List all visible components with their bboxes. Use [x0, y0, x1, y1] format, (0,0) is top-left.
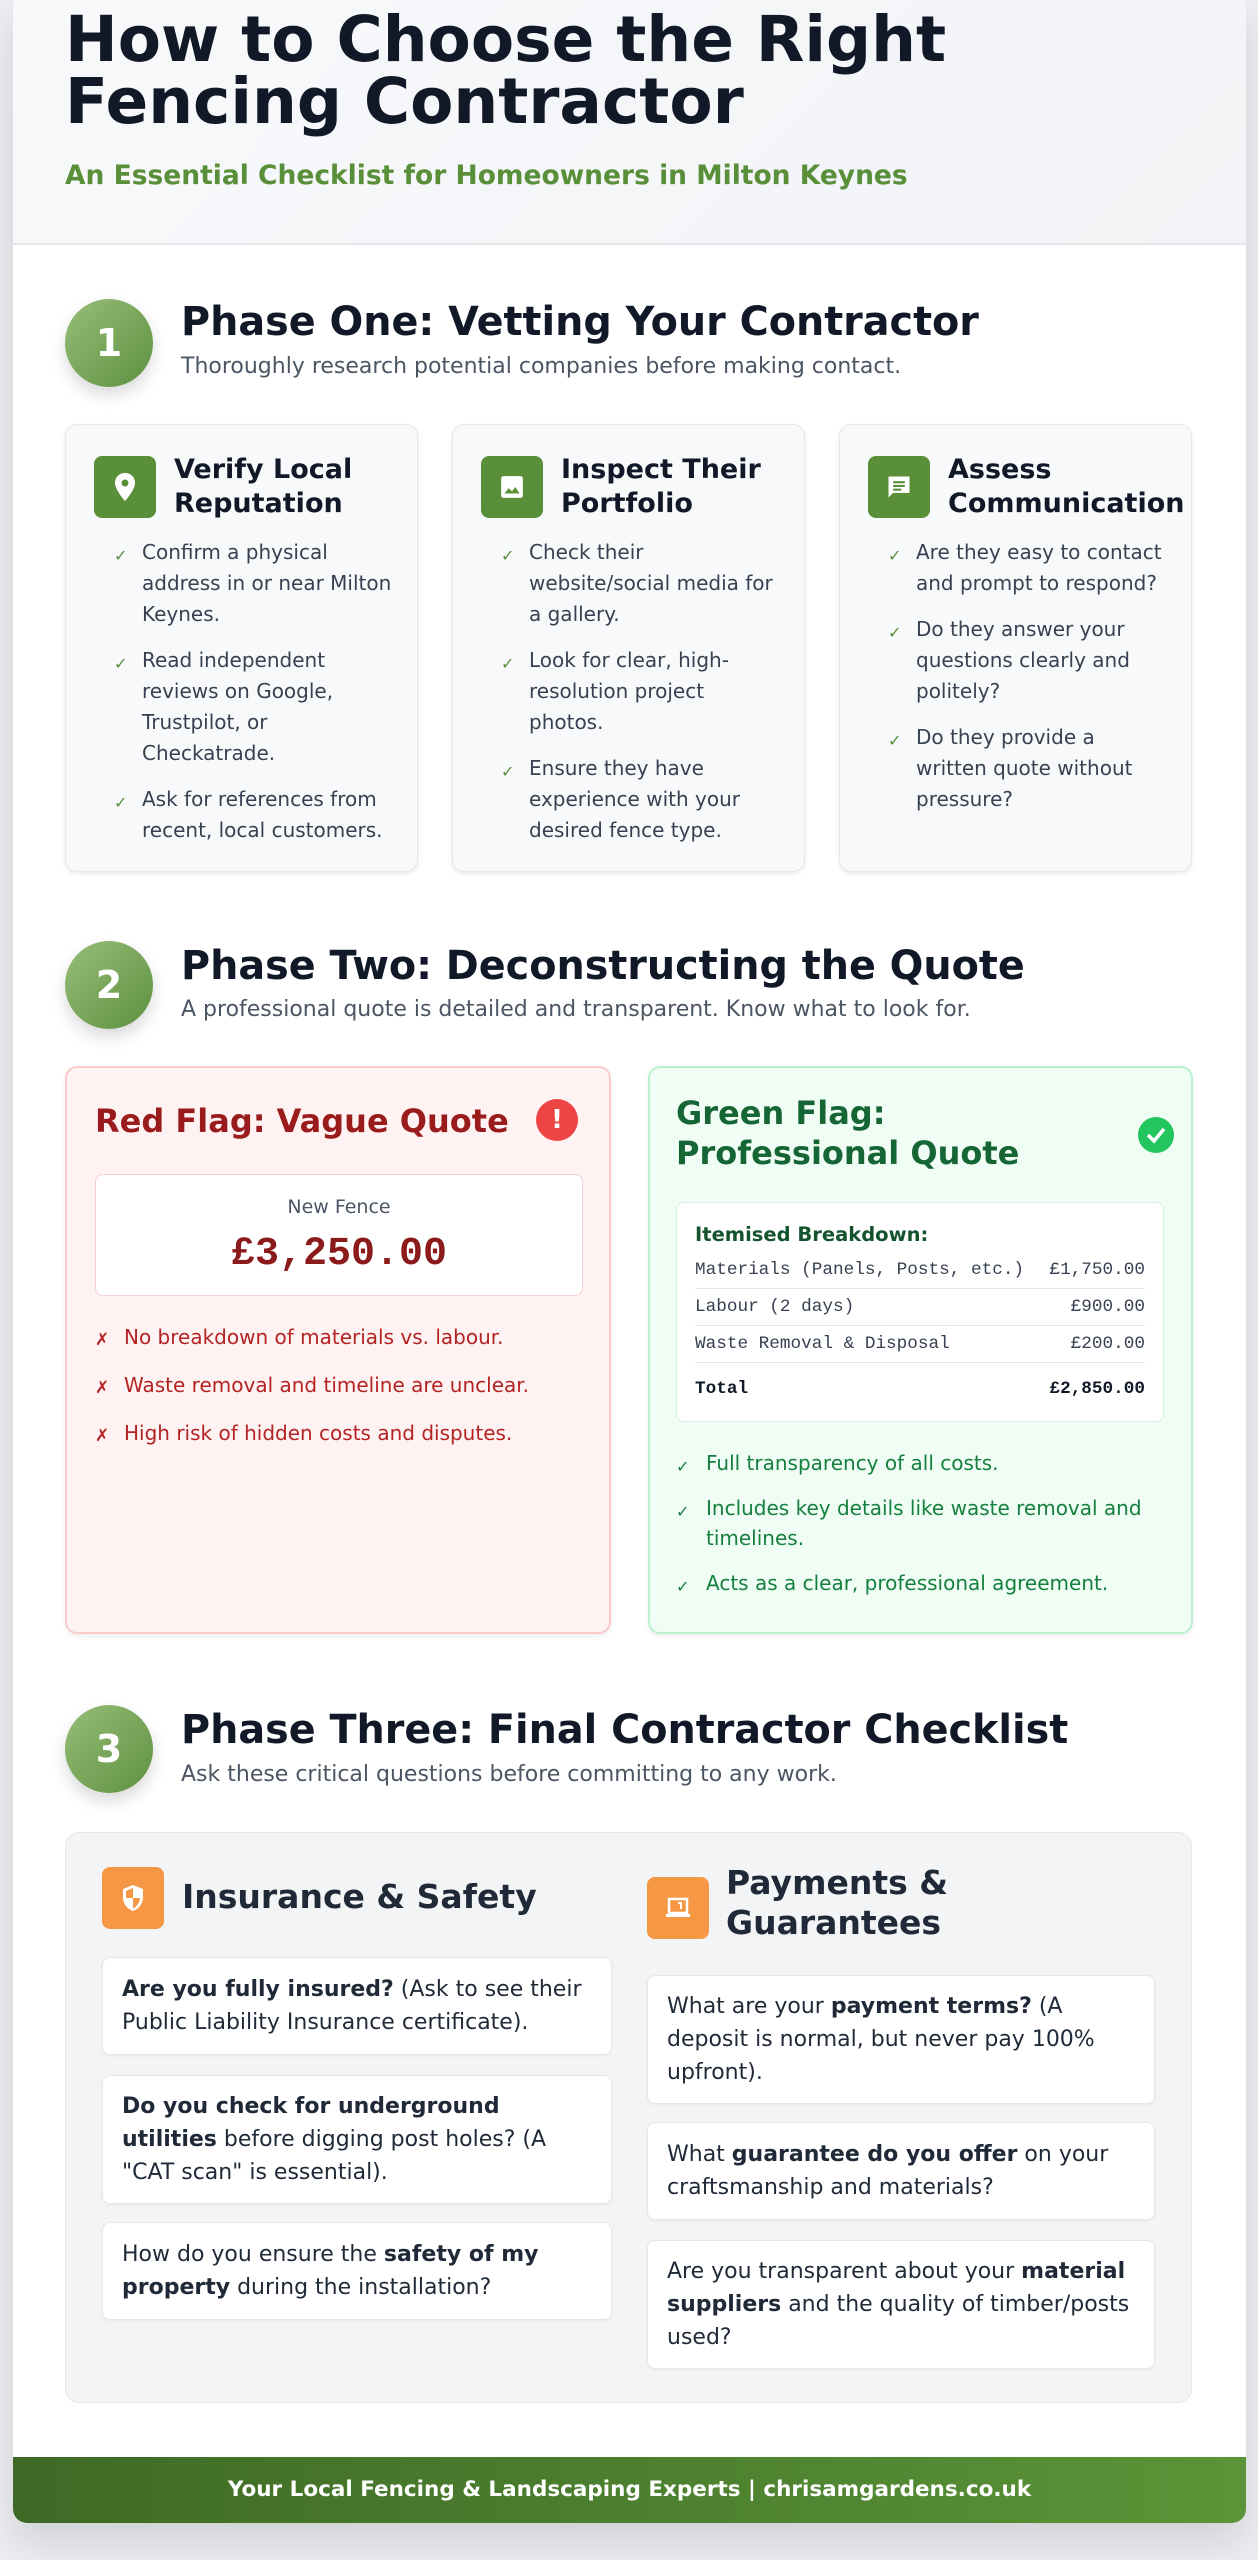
- icon: image: [481, 456, 543, 518]
- insurance heading: Insurance & Safety: [182, 1877, 537, 1916]
- footer: [13, 2457, 1246, 2523]
- panel: red flag: [65, 1066, 611, 1634]
- title: [65, 3, 946, 138]
- phase 1 heading: [60, 299, 979, 400]
- card heading: [948, 454, 1184, 519]
- card heading: [174, 454, 352, 519]
- footer: Your Local Fencing & Landscaping Experts | chrisamgardens.co.uk: [228, 2477, 1031, 2502]
- red flag list: [97, 1325, 529, 1445]
- green flag heading: [676, 1094, 1019, 1172]
- card heading: [561, 454, 761, 519]
- card: verify local reputation: [65, 424, 418, 872]
- checklist: Look for clear, high-resolution project photos.: [529, 648, 729, 734]
- question boxes col 2: [647, 1975, 1155, 2104]
- number badge 1: [65, 299, 153, 387]
- checklist: Read independent reviews on Google, Trustpilot, or Checkatrade.: [142, 648, 333, 765]
- icon: map pin: [94, 456, 156, 518]
- itemised breakdown box: £900.00: [1071, 1297, 1145, 1317]
- red flag list: Waste removal and timeline are unclear.: [124, 1373, 529, 1397]
- title: How to Choose the Right: [65, 3, 946, 76]
- checklist: Are they easy to contact and prompt to respond?: [916, 540, 1162, 595]
- green flag list: Includes key details like waste removal and timelines.: [706, 1496, 1142, 1550]
- number badge 3: 3: [96, 1727, 122, 1771]
- checklist: [503, 540, 773, 842]
- number badge 2: 2: [96, 963, 122, 1007]
- panel: final checklist: [65, 1832, 1192, 2403]
- heading text: Phase Two: Deconstructing the Quote: [181, 943, 1025, 989]
- card heading: Communication: [948, 488, 1184, 519]
- payments heading: Guarantees: [726, 1903, 941, 1942]
- vague quote box: [95, 1174, 583, 1296]
- title: Fencing Contractor: [65, 65, 744, 138]
- question boxes col 2: What are your payment terms? (A deposit is normal, but never pay 100% upfront).: [667, 1994, 1095, 2085]
- card heading: Inspect Their: [561, 454, 761, 485]
- itemised breakdown box: £200.00: [1071, 1334, 1145, 1354]
- phase 3 heading: [60, 1705, 1068, 1806]
- vague quote box: £3,250.00: [231, 1232, 447, 1277]
- card heading: Portfolio: [561, 488, 693, 519]
- question boxes col 1: Are you fully insured? (Ask to see their Public Liability Insurance certificate).: [122, 1977, 581, 2035]
- checklist: Ask for references from recent, local customers.: [142, 787, 383, 842]
- card: inspect portfolio: [452, 424, 805, 872]
- checklist: Do they answer your questions clearly and politely?: [916, 617, 1130, 703]
- icon: exclamation: !: [551, 1105, 563, 1135]
- itemised breakdown box: Labour (2 days): [695, 1297, 854, 1317]
- number badge 3: [65, 1705, 153, 1793]
- checklist: Check their website/social media for a gallery.: [529, 540, 773, 626]
- green flag list: Acts as a clear, professional agreement.: [706, 1571, 1108, 1595]
- itemised breakdown box: Materials (Panels, Posts, etc.): [695, 1260, 1024, 1280]
- phase 1 subtitle: Thoroughly research potential companies before making contact.: [181, 354, 901, 379]
- heading text: Phase One: Vetting Your Contractor: [181, 299, 979, 345]
- card: assess communication: [839, 424, 1192, 872]
- checklist: [890, 540, 1162, 811]
- panel: green flag: [648, 1066, 1193, 1634]
- subtitle: An Essential Checklist for Homeowners in Milton Keynes: [65, 160, 908, 191]
- phase 2 heading: [60, 941, 1025, 1042]
- heading text: Phase Three: Final Contractor Checklist: [181, 1707, 1068, 1753]
- phase 3 subtitle: Ask these critical questions before committing to any work.: [181, 1762, 837, 1787]
- red flag list: High risk of hidden costs and disputes.: [124, 1421, 512, 1445]
- panel: final checklist: Are you transparent about your material suppliers and the quality of timber/posts used?: [667, 2259, 1129, 2350]
- green flag list: Full transparency of all costs.: [706, 1451, 999, 1475]
- payments heading: Payments &: [726, 1863, 948, 1902]
- card heading: Assess: [948, 454, 1052, 485]
- phase 2 subtitle: A professional quote is detailed and transparent. Know what to look for.: [181, 997, 971, 1022]
- card heading: Reputation: [174, 488, 343, 519]
- itemised breakdown box: £2,850.00: [1049, 1379, 1145, 1399]
- card heading: Verify Local: [174, 454, 352, 485]
- payments heading: [726, 1863, 948, 1942]
- number badge 2: [65, 941, 153, 1029]
- green flag list: [678, 1451, 1142, 1595]
- itemised breakdown box: Waste Removal & Disposal: [695, 1334, 950, 1354]
- red flag heading: Red Flag: Vague Quote: [95, 1102, 509, 1140]
- checklist: Do they provide a written quote without pressure?: [916, 725, 1132, 811]
- checklist: Confirm a physical address in or near Milton Keynes.: [142, 540, 391, 626]
- itemised breakdown box: Total: [695, 1379, 748, 1399]
- panel: final checklist: What guarantee do you offer on your craftsmanship and materials?: [667, 2142, 1108, 2200]
- checklist: Ensure they have experience with your desired fence type.: [529, 756, 740, 842]
- header: [13, 0, 1246, 245]
- icon: chat: [868, 456, 930, 518]
- green flag heading: Green Flag:: [676, 1094, 886, 1132]
- red flag list: No breakdown of materials vs. labour.: [124, 1325, 504, 1349]
- icon: shield: [102, 1867, 164, 1929]
- vague quote box: New Fence: [287, 1196, 391, 1218]
- green flag heading: Professional Quote: [676, 1134, 1019, 1172]
- itemised breakdown box: [676, 1202, 1164, 1422]
- panel: final checklist: How do you ensure the safety of my property during the installation?: [122, 2242, 538, 2300]
- checklist: [116, 540, 391, 842]
- question boxes col 1: [102, 1957, 612, 2055]
- itemised breakdown box: Itemised Breakdown:: [695, 1223, 928, 1246]
- icon: check circle: [1138, 1117, 1174, 1153]
- icon: payment: [647, 1877, 709, 1939]
- panel: final checklist: Do you check for underground utilities before digging post holes? (A "CAT scan" is essential).: [122, 2094, 546, 2185]
- number badge 1: 1: [96, 321, 122, 365]
- itemised breakdown box: £1,750.00: [1049, 1260, 1145, 1280]
- icon: exclamation: [536, 1099, 578, 1141]
